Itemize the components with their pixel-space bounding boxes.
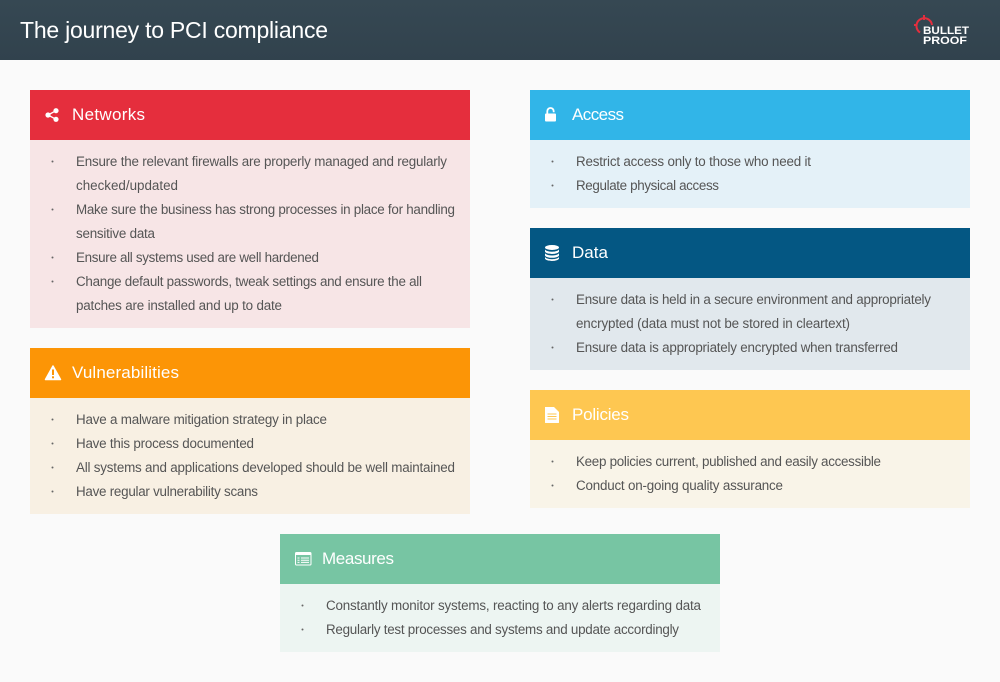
list: Access items	[552, 154, 811, 193]
list: Access items: Restrict access only to those who need it	[576, 154, 811, 169]
list: Networks items: Change default passwords, tweak settings and ensure the all	[76, 274, 422, 289]
list: Access items: Regulate physical access	[576, 178, 719, 193]
icon: warning triangle	[46, 366, 60, 380]
icon: database	[545, 245, 559, 261]
icon: browser list	[296, 552, 311, 565]
list: Networks items: Make sure the business has strong processes in place for handling	[76, 202, 455, 217]
heading: Measures: Measures	[322, 549, 394, 568]
heading: Vulnerabilities: Vulnerabilities	[72, 363, 179, 382]
list: Networks items: Ensure all systems used are well hardened	[76, 250, 319, 265]
heading: Networks: Networks	[72, 105, 145, 124]
header bar	[0, 0, 1000, 60]
list: Networks items: patches are installed and up to date	[76, 298, 282, 313]
list: Data items	[552, 292, 931, 355]
list: Data items: encrypted (data must not be stored in cleartext)	[576, 316, 850, 331]
logo: Bullet Proof: BULLET	[923, 25, 969, 37]
panel: Access	[530, 90, 970, 208]
list: Vulnerabilities items: Have regular vulnerability scans	[76, 484, 258, 499]
logo: Bullet Proof	[914, 15, 969, 47]
icon: document	[545, 407, 559, 423]
list: Policies items: Keep policies current, published and easily accessible	[576, 454, 881, 469]
list: Networks items: sensitive data	[76, 226, 156, 241]
list: Measures items: Constantly monitor systems, reacting to any alerts regarding data	[326, 598, 702, 613]
panel: Data	[530, 228, 970, 370]
list: Measures items: Regularly test processes and systems and update accordingly	[326, 622, 679, 637]
icon: share	[45, 108, 59, 122]
list: Vulnerabilities items: Have this process documented	[76, 436, 254, 451]
list: Networks items: Ensure the relevant firewalls are properly managed and regularly	[76, 154, 447, 169]
panel: Policies	[530, 390, 970, 508]
panel: Vulnerabilities	[30, 348, 470, 514]
heading: Policies: Policies	[572, 405, 629, 424]
list: Policies items: Conduct on-going quality assurance	[576, 478, 783, 493]
list: Networks items: checked/updated	[76, 178, 178, 193]
heading: Data: Data	[572, 243, 609, 262]
panel: Measures	[280, 534, 720, 652]
list: Data items: Ensure data is held in a secure environment and appropriately	[576, 292, 931, 307]
list: Vulnerabilities items: All systems and applications developed should be well maintained	[76, 460, 455, 475]
list: Policies items	[552, 454, 881, 493]
heading: Access: Access	[572, 105, 624, 124]
list: Vulnerabilities items: Have a malware mitigation strategy in place	[76, 412, 327, 427]
list: Data items: Ensure data is appropriately encrypted when transferred	[576, 340, 898, 355]
list: Vulnerabilities items	[52, 412, 455, 499]
icon: open padlock	[545, 108, 556, 122]
list: Networks items	[52, 154, 455, 313]
panel: Networks	[30, 90, 470, 328]
logo: Bullet Proof: PROOF	[923, 35, 967, 47]
list: Measures items	[302, 598, 702, 637]
title: The journey to PCI compliance	[20, 17, 328, 43]
